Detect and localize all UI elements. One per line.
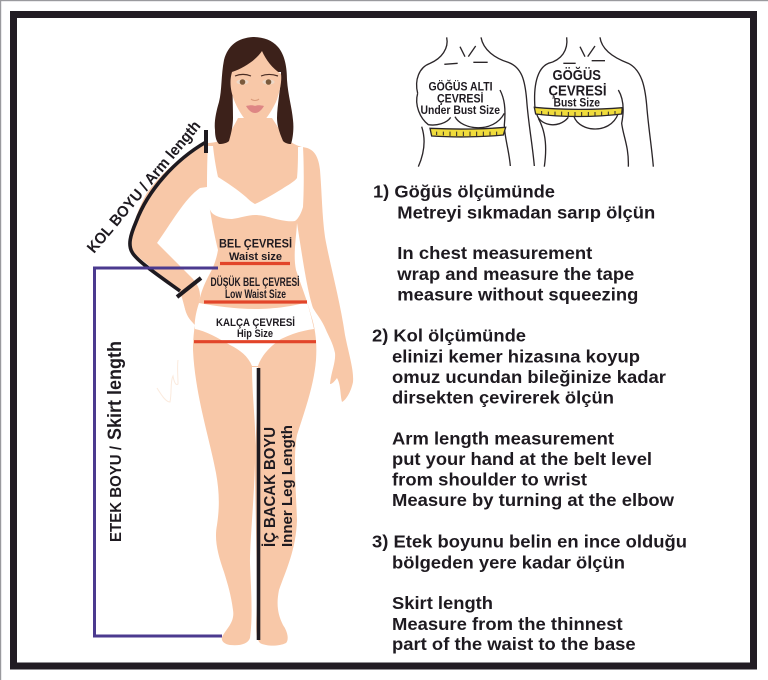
right iris: [266, 79, 271, 85]
label: low waist: [210, 276, 300, 301]
hair: [215, 37, 293, 144]
instructions 1: chest: Metreyi sıkmadan sarıp ölçün: [397, 202, 655, 222]
hair and face: [215, 37, 293, 144]
faint sketch mark: [157, 360, 178, 402]
skirt length label: Skirt length: [104, 341, 126, 440]
forearm hand patch: [133, 243, 200, 325]
label: hip: KALÇA ÇEVRESİ: [216, 316, 295, 329]
instructions 3: skirt: Measure from the thinnest: [392, 614, 623, 634]
instructions 2: arm: put your hand at the belt level: [392, 449, 652, 469]
skirt length bracket: [94, 268, 222, 636]
label: waist: BEL ÇEVRESİ: [219, 236, 292, 250]
bust label: GÖĞÜS: [552, 66, 601, 84]
inner leg label: İÇ BACAK BOYU: [261, 427, 279, 547]
arm length label: KOL BOYU / Arm length: [84, 118, 204, 257]
measure lines: waist, low waist, hip: [194, 264, 316, 342]
left eye: [236, 80, 248, 84]
bust label: Bust Size: [554, 96, 600, 110]
under bust label: [420, 80, 500, 117]
instructions 2: arm: Arm length measurement: [392, 428, 614, 448]
left iris: [240, 79, 245, 85]
skirt length label: [104, 341, 126, 542]
instructions 2: arm: elinizi kemer hizasına koyup: [392, 346, 640, 366]
bra: [207, 146, 304, 221]
label: hip: [216, 316, 295, 340]
instructions 3: skirt: Skirt length: [392, 593, 493, 613]
bust label: [548, 66, 606, 110]
instructions 2: arm: dirsekten çevirerek ölçün: [392, 387, 614, 407]
arm length line: [130, 130, 206, 297]
face: [231, 51, 281, 127]
instructions 1: chest: 1) Göğüs ölçümünde: [373, 181, 555, 201]
instructions 2: arm: from shoulder to wrist: [392, 470, 587, 490]
instructions 1: chest: In chest measurement: [397, 243, 592, 263]
instructions 3: skirt: 3) Etek boyunu belin en ince olduğu: [372, 532, 687, 552]
figure: woman body: [130, 118, 353, 646]
instructions 1: chest: [373, 181, 655, 305]
under bust illustration: [417, 37, 534, 167]
instructions 1: chest: measure without squeezing: [397, 285, 638, 305]
label: low waist: Low Waist Size: [225, 289, 286, 301]
instructions 3: skirt: [372, 532, 687, 654]
skirt length label: ETEK BOYU /: [108, 445, 125, 542]
instructions 2: arm: 2) Kol ölçümünde: [372, 326, 526, 346]
bust label: ÇEVRESİ: [548, 83, 606, 100]
under bust label: GÖĞÜS ALTI: [428, 80, 492, 94]
instructions 1: chest: wrap and measure the tape: [396, 264, 635, 284]
under bust label: ÇEVRESİ: [437, 92, 484, 105]
label: waist: Waist size: [229, 251, 282, 263]
right eye: [262, 80, 274, 84]
instructions 3: skirt: bölgeden yere kadar ölçün: [392, 552, 625, 572]
inner leg line: [257, 368, 260, 640]
nose: [251, 99, 259, 100]
eyebrows: [235, 74, 278, 76]
bust illustration: [534, 37, 653, 167]
lips: [246, 105, 264, 113]
body skin: [130, 118, 353, 646]
under bust label: Under Bust Size: [420, 105, 500, 117]
instructions 2: arm: [372, 326, 674, 510]
instructions 2: arm: omuz ucundan bileğinize kadar: [392, 367, 666, 387]
label: waist: [219, 236, 292, 263]
briefs: [195, 302, 314, 366]
label: low waist: DÜŞÜK BEL ÇEVRESİ: [210, 276, 300, 289]
inner leg label: [261, 425, 296, 547]
white triangle between arm and torso: [157, 187, 218, 302]
instructions 3: skirt: part of the waist to the base: [392, 634, 636, 654]
inner leg label: Inner Leg Length: [279, 425, 296, 547]
label: hip: Hip Size: [237, 328, 273, 340]
instructions 2: arm: Measure by turning at the elbow: [392, 490, 674, 510]
